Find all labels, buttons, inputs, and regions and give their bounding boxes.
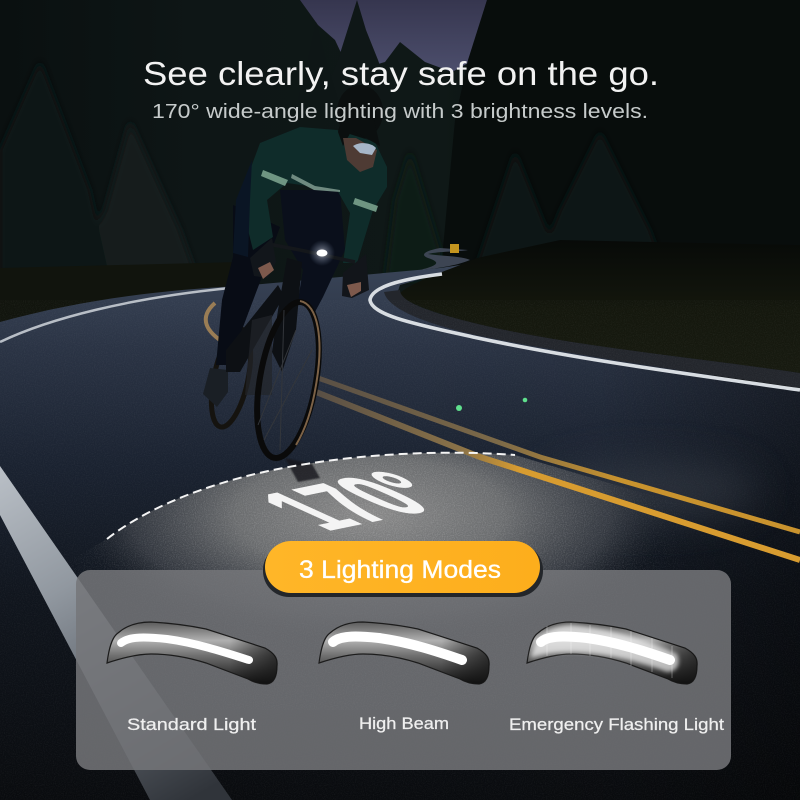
faint light on far lane <box>540 460 760 520</box>
subtitle: 170° wide-angle lighting with 3 brightness levels. <box>152 101 648 123</box>
cap blob behind text <box>337 85 383 139</box>
badge label: 3 Lighting Modes <box>299 556 501 584</box>
road sign <box>450 244 459 253</box>
left glove <box>250 238 276 278</box>
rear wheel <box>204 326 258 430</box>
gravel shoulder <box>384 290 800 388</box>
label: high beam: High Beam <box>359 715 449 733</box>
sunglasses <box>353 143 376 155</box>
badge: 3 lighting modes <box>263 541 543 597</box>
reflective band: right arm <box>353 198 378 212</box>
front wheel <box>247 297 329 463</box>
panel background <box>76 570 731 770</box>
left hand <box>258 262 274 279</box>
170 degree road marking: 170° <box>231 460 486 542</box>
grass island on the right <box>400 240 800 373</box>
jersey torso and arms <box>248 127 387 263</box>
far leg <box>216 205 280 365</box>
bike front light core <box>316 250 328 256</box>
dashed beam arc <box>107 453 515 539</box>
road grain <box>0 300 800 800</box>
bike front light glow <box>309 240 335 266</box>
reflective band: left arm <box>261 170 288 186</box>
green lens flare dots <box>456 398 527 411</box>
right white road edge line <box>370 274 800 390</box>
background: night forest and sky <box>0 0 800 320</box>
distant road bend <box>420 248 470 270</box>
near leg <box>280 190 345 312</box>
face <box>343 138 377 172</box>
bike frame <box>226 258 302 372</box>
icon: high beam <box>319 622 489 684</box>
reflective band: chest <box>291 174 340 192</box>
icon: standard light <box>107 622 277 684</box>
mid bike detail <box>245 315 272 395</box>
double yellow centre lines <box>206 303 800 560</box>
label: standard light: Standard Light <box>127 715 256 734</box>
badge pill <box>265 541 540 593</box>
head cap <box>338 116 380 146</box>
label: emergency flashing light: Emergency Flashing Light <box>509 715 724 734</box>
handlebar <box>268 244 355 262</box>
cyclist shadow on road <box>285 458 320 482</box>
right fingers <box>347 282 361 297</box>
cyclist <box>203 85 387 482</box>
panel: lighting modes <box>76 570 731 770</box>
dark jacket side <box>233 160 252 257</box>
title: See clearly, stay safe on the go. <box>143 55 659 92</box>
right glove and hand <box>342 254 369 298</box>
left white road edge line <box>0 288 230 342</box>
badge shadow <box>263 544 543 597</box>
light pool on road <box>81 452 660 616</box>
road surface <box>0 262 800 800</box>
shoe <box>203 368 228 407</box>
lower-left white road edge <box>0 466 232 800</box>
road darkening toward right <box>400 300 800 800</box>
icon: emergency flashing light <box>527 622 697 684</box>
verge: grass left of the road <box>0 262 240 322</box>
